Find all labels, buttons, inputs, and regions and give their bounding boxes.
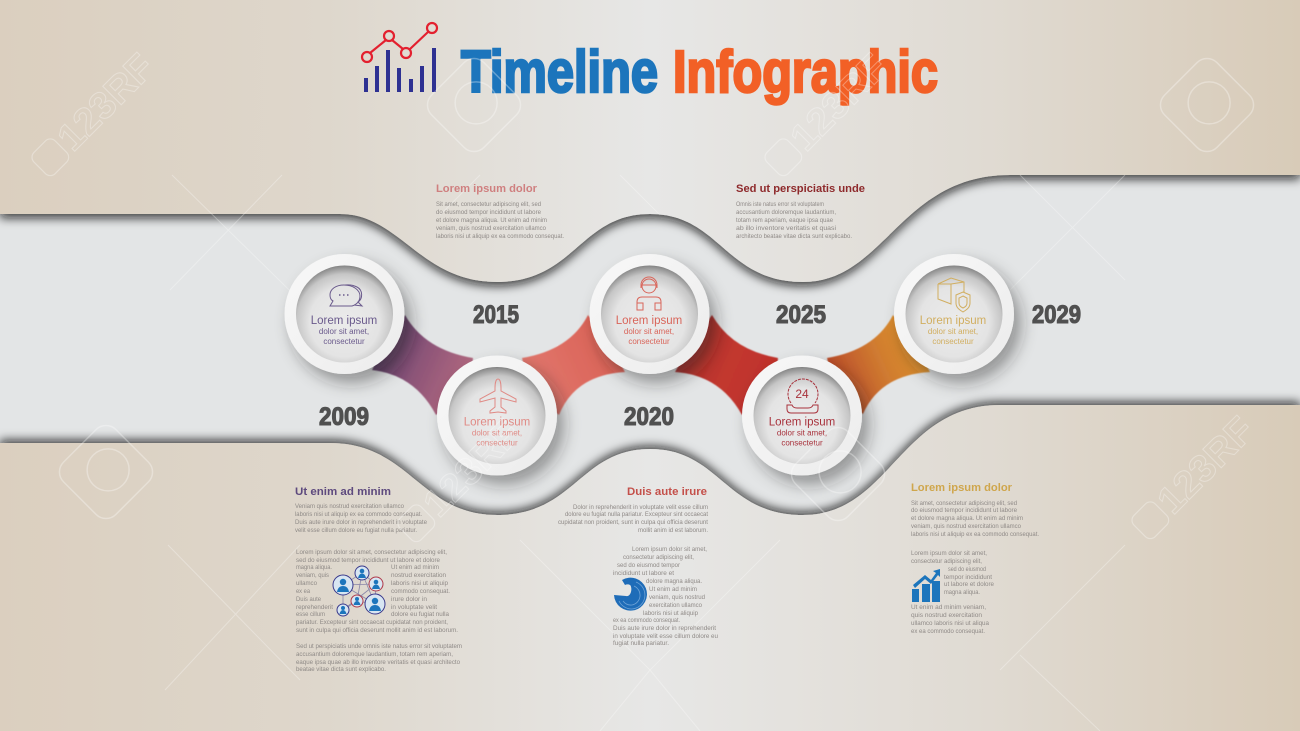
wrapped body: quis nostrud exercitation [911,612,983,619]
watermark text: 123RF [416,412,529,525]
sublabel: dolor sit amet, [624,327,674,336]
icon: box and shield [938,278,970,312]
wrapped body: sed do eiusmod [948,566,986,573]
watermarks [26,46,1263,549]
connector 2 [522,315,625,415]
icon: people network [333,566,385,616]
wrapped body: commodo consequat. [391,588,450,595]
sublabel: dolor sit amet, [777,428,827,438]
title word: Timeline: Timeline [461,39,658,105]
heading: Duis aute irure [627,486,707,498]
icon: headset agent [637,277,661,310]
wrapped body: consectetur adipiscing elit, [623,554,694,561]
node: 2020 headset [590,254,710,374]
closing body: eaque ipsa quae ab illo inventore veritatis et quasi architecto [296,659,461,666]
title [362,23,938,105]
wrapped body: Lorem ipsum dolor sit amet, consectetur adipiscing elit, [296,549,447,556]
heading: Lorem ipsum dolor [911,482,1013,494]
wrapped body: esse cillum [296,611,325,618]
year 2020: 2020 [624,403,674,431]
body: ab illo inventore veritatis et quasi [736,225,836,232]
intro body: et dolore magna aliqua. Ut enim ad minim [911,515,1023,522]
body [736,201,852,240]
wrapped body: consectetur adipiscing elit, [911,558,982,565]
wrapped body: exercitation ullamco [649,602,703,609]
text block: Lorem ipsum dolor (top) [436,183,564,240]
wrapped body: ut labore et dolore [944,581,995,588]
watermark stamp [786,422,890,526]
icon text: 24: 24 [795,387,809,401]
connector 1 [372,315,473,415]
label: Lorem ipsum [920,315,986,327]
closing body: beatae vitae dicta sunt explicabo. [296,666,386,673]
icon: speech bubbles [330,285,362,306]
icon: chart logo [362,23,437,92]
body: laboris nisi ut aliquip ex ea commodo consequat. [436,233,564,240]
wrapped body: incididunt ut labore et [613,570,674,577]
wrapped body: dolore eu fugiat nulla [391,611,450,618]
intro body: dolore eu fugiat nulla pariatur. Excepteur sint occaecat [565,511,708,518]
body: Omnis iste natus error sit voluptatem [736,201,824,208]
label: Lorem ipsum [616,315,682,327]
wrapped body: magna aliqua. [944,589,980,596]
label: Lorem ipsum [311,315,377,327]
wrapped body: sunt in culpa qui officia deserunt mollit anim id est laborum. [296,627,458,634]
heading: Lorem ipsum dolor [436,183,538,195]
wrapped body: Duis aute irure dolor in reprehenderit [613,625,716,632]
sublabel line 2: consectetur [323,337,365,346]
body [436,201,564,240]
intro body [911,500,1039,538]
body: architecto beatae vitae dicta sunt explicabo. [736,233,852,240]
icon: 24 hour phone [787,379,818,413]
wrapped body [613,546,719,647]
connector 3 [675,315,778,415]
wrapped body: irure dolor in [391,596,428,603]
sublabel line 2: consectetur [628,337,670,346]
sublabel: dolor sit amet, [319,327,369,336]
year 2029: 2029 [1032,301,1081,329]
sublabel: dolor sit amet, [472,428,522,438]
wrapped body: fugiat nulla pariatur. [613,640,669,647]
upper paper panel [0,0,1300,282]
watermark text [759,46,896,183]
sublabel: dolor sit amet, [928,327,978,336]
intro body: mollit anim id est laborum. [638,527,708,534]
watermark text [26,46,163,183]
sublabel line 2: consectetur [932,337,974,346]
wrapped body: laboris nisi ut aliquip [391,580,449,587]
wrapped body: reprehenderit [296,604,333,611]
closing body: Sed ut perspiciatis unde omnis iste natus error sit voluptatem [296,643,462,650]
watermark text [392,412,529,549]
node: 2015 airplane [437,356,557,476]
label: Lorem ipsum [769,416,835,428]
wrapped body [911,550,995,635]
label: Lorem ipsum [464,416,530,428]
wrapped body: dolore magna aliqua. [646,578,702,585]
body: do eiusmod tempor incididunt ut labore [436,209,542,216]
wrapped body: ex ea [296,588,311,595]
body: accusantium doloremque laudantium, [736,209,836,216]
intro body: do eiusmod tempor incididunt ut labore [911,507,1018,514]
body: et dolore magna aliqua. Ut enim ad minim [436,217,547,224]
year 2009: 2009 [319,403,369,431]
icon: growth chart [912,569,940,602]
icon: airplane [480,379,516,413]
wrapped body: tempor incididunt [944,574,992,581]
closing body: accusantium doloremque laudantium, totam rem aperiam, [296,651,453,658]
watermark text: 123RF [783,46,896,159]
decorative light lines [165,175,1125,731]
intro body: laboris nisi ut aliquip ex ea commodo consequat. [295,511,422,518]
wrapped body: Ut enim ad minim veniam, [911,604,986,611]
connector 4 [827,315,930,414]
wrapped body: nostrud exercitation [391,572,447,579]
intro body: Dolor in reprehenderit in voluptate velit esse cillum [573,504,708,511]
intro body: Duis aute irure dolor in reprehenderit in voluptate [295,519,428,526]
wrapped body: laboris nisi ut aliquip [643,610,699,617]
wrapped body: veniam, quis nostrud [649,594,706,601]
wrapped body: in voluptate velit [391,604,437,611]
wrapped body: Duis aute [296,596,322,603]
road band [0,160,1300,530]
icon: radial chart [614,578,647,611]
node: 2009 speech bubbles [284,254,404,374]
intro body: laboris nisi ut aliquip ex ea commodo consequat. [911,531,1039,538]
wrapped body: pariatur. Excepteur sint occaecat cupidatat non proident, [296,619,448,626]
watermark stamp [422,53,526,157]
wrapped body: ex ea commodo consequat. [911,628,985,635]
wrapped body: Ut enim ad minim [649,586,697,593]
sublabel line 2: consectetur [476,438,518,448]
wrapped body: sed do eiusmod tempor [617,562,680,569]
text block: Duis aute irure [558,486,719,647]
watermark text [1126,409,1263,546]
wrapped body: ullamco laboris nisi ut aliqua [911,620,990,627]
body: veniam, quis nostrud exercitation ullamco [436,225,547,232]
wrapped body: Lorem ipsum dolor sit amet, [632,546,707,553]
body: Sit amet, consectetur adipiscing elit, sed [436,201,542,208]
year 2025: 2025 [776,301,826,329]
intro body [558,504,708,534]
node: 2029 box shield [894,254,1014,374]
intro body: velit esse cillum dolore eu fugiat nulla pariatur. [295,527,417,534]
year 2015: 2015 [473,301,519,329]
wrapped body: Lorem ipsum dolor sit amet, [911,550,987,557]
watermark text: 123RF [1150,409,1263,522]
wrapped body: veniam, quis [296,572,329,579]
lower paper panel [0,405,1300,731]
heading: Ut enim ad minim [295,486,391,498]
node: 2025 24h phone [742,356,862,476]
heading: Sed ut perspiciatis unde [736,183,865,195]
intro body: Veniam quis nostrud exercitation ullamco [295,503,405,510]
intro body: veniam, quis nostrud exercitation ullamco [911,523,1022,530]
wrapped body: Ut enim ad minim [391,564,439,571]
body: totam rem aperiam, eaque ipsa quae [736,217,834,224]
text block: Ut enim ad minim [295,486,462,673]
wrapped body [296,549,458,634]
intro body [295,503,428,534]
wrapped body: magna aliqua. [296,564,332,571]
wrapped body: ullamco [296,580,318,587]
watermark text: 123RF [50,46,163,159]
text block: Sed ut perspiciatis unde [736,183,865,240]
sublabel line 2: consectetur [781,438,823,448]
wrapped body: ex ea commodo consequat. [613,617,680,624]
intro body: cupidatat non proident, sunt in culpa qui officia deserunt [558,519,708,526]
closing body [296,643,462,673]
text block: Lorem ipsum dolor (right) [911,482,1039,635]
watermark stamp [54,420,158,524]
title word: Infographic: Infographic [673,39,938,105]
intro body: Sit amet, consectetur adipiscing elit, sed [911,500,1018,507]
wrapped body: sed do eiusmod tempor incididunt ut labore et dolore [296,557,441,564]
watermark stamp [1155,53,1259,157]
wrapped body: in voluptate velit esse cillum dolore eu [613,633,719,640]
